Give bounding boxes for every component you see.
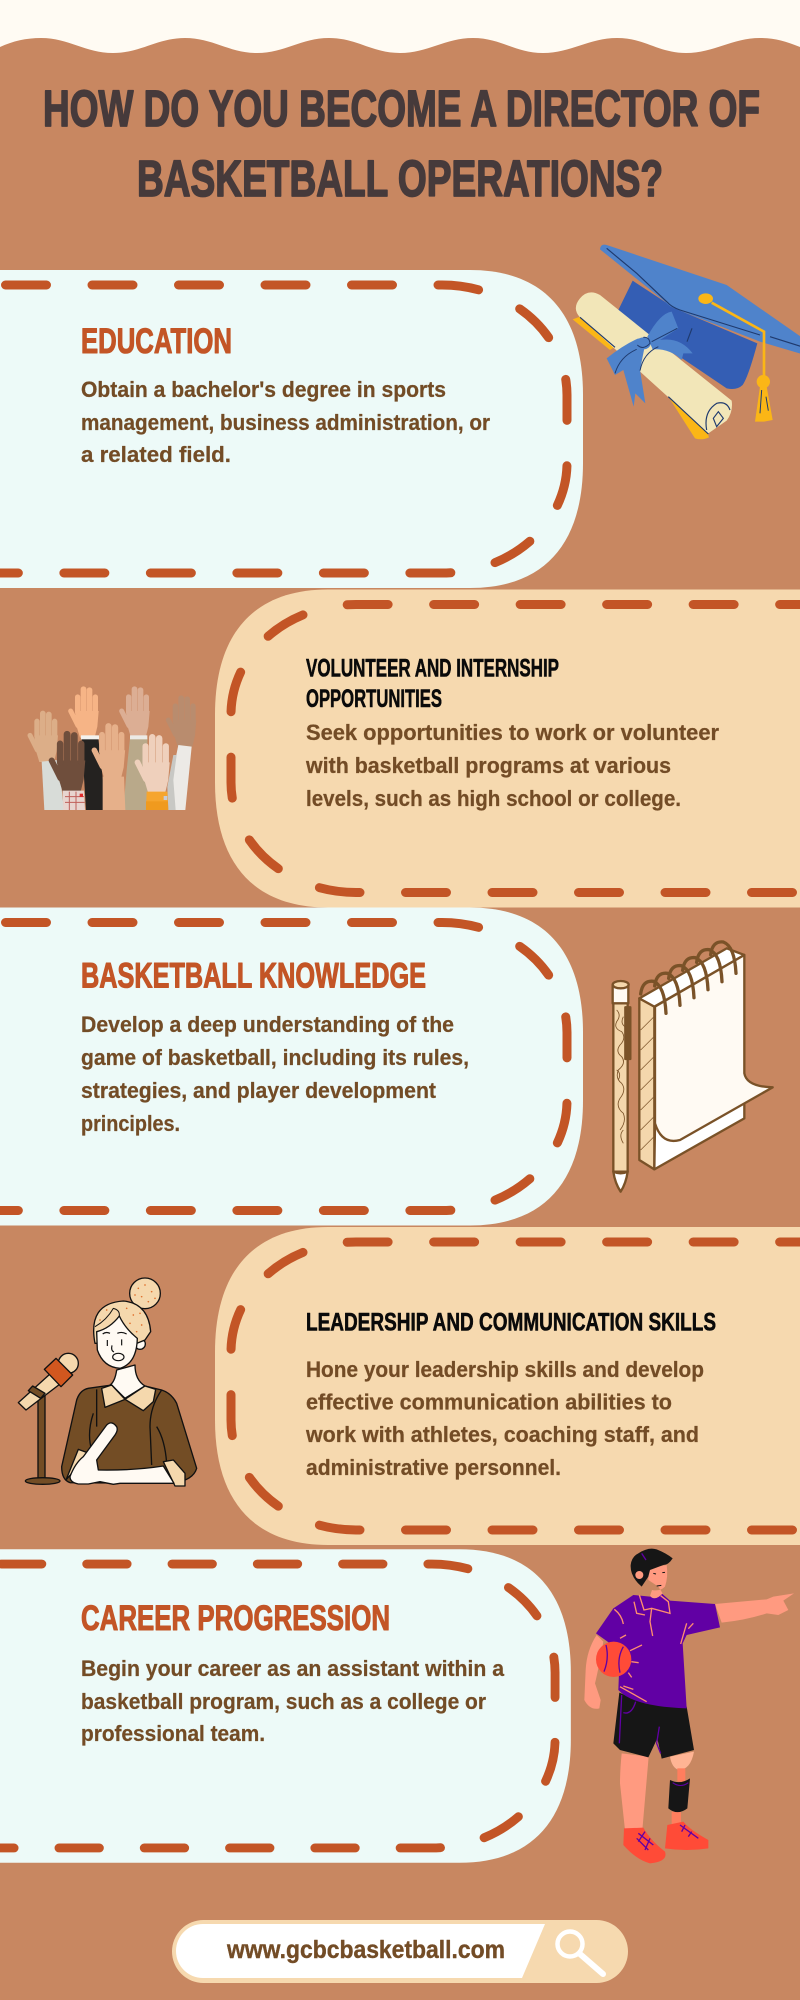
- panel: career progression: [0, 1549, 571, 1863]
- panel: leadership and communication: [215, 1227, 800, 1545]
- icon: raised hands: [30, 686, 196, 810]
- text: career progression: [81, 1656, 505, 1746]
- text: volunteer: Seek opportunities to work or volunteer: [306, 720, 719, 745]
- panel: education: [0, 270, 583, 588]
- text: career progression: basketball program, such as a college or: [81, 1689, 486, 1714]
- text: basketball knowledge: [81, 1012, 469, 1136]
- heading: volunteer and internship opportunities: OPPORTUNITIES: [306, 685, 442, 713]
- heading: education: EDUCATION: [81, 322, 232, 361]
- heading: volunteer and internship opportunities: [306, 654, 559, 713]
- text: basketball knowledge: game of basketball, including its rules,: [81, 1045, 469, 1070]
- text: education: a related field.: [81, 442, 231, 467]
- text: leadership: Hone your leadership skills and develop: [306, 1357, 704, 1382]
- icon: graduation cap and diploma: [573, 245, 800, 439]
- title: [43, 80, 760, 207]
- text: leadership: administrative personnel.: [306, 1455, 561, 1480]
- text: leadership: work with athletes, coaching staff, and: [305, 1422, 699, 1447]
- wavy top border: [0, 0, 800, 53]
- icon: notebook and pen: [613, 942, 773, 1192]
- search bar: [172, 1920, 628, 1983]
- text: career progression: professional team.: [81, 1721, 265, 1746]
- panel: volunteer and internship: [215, 590, 800, 908]
- heading: career progression: CAREER PROGRESSION: [81, 1599, 390, 1638]
- text: career progression: Begin your career as an assistant within a: [81, 1656, 505, 1681]
- text: leadership: effective communication abilities to: [306, 1390, 672, 1414]
- icon: basketball coach pointing: [584, 1549, 794, 1863]
- text: education: [81, 377, 490, 467]
- panel: basketball knowledge: [0, 908, 583, 1226]
- icon: woman speaking at microphone: [18, 1278, 197, 1486]
- text: education: management, business administration, or: [81, 410, 490, 435]
- text: volunteer: with basketball programs at various: [305, 753, 671, 778]
- text: volunteer: levels, such as high school or college.: [306, 786, 681, 811]
- text: leadership: [305, 1357, 704, 1480]
- icon: magnifying glass: [558, 1932, 603, 1974]
- text: basketball knowledge: strategies, and player development: [81, 1078, 437, 1103]
- heading: volunteer and internship opportunities: VOLUNTEER AND INTERNSHIP: [306, 654, 559, 682]
- text: volunteer: [305, 720, 719, 811]
- heading: basketball knowledge: BASKETBALL KNOWLEDGE: [81, 956, 426, 996]
- text: basketball knowledge: principles.: [81, 1111, 180, 1136]
- url text: www.gcbcbasketball.com: [226, 1936, 505, 1964]
- text: basketball knowledge: Develop a deep understanding of the: [81, 1012, 454, 1037]
- text: education: Obtain a bachelor's degree in sports: [81, 377, 446, 402]
